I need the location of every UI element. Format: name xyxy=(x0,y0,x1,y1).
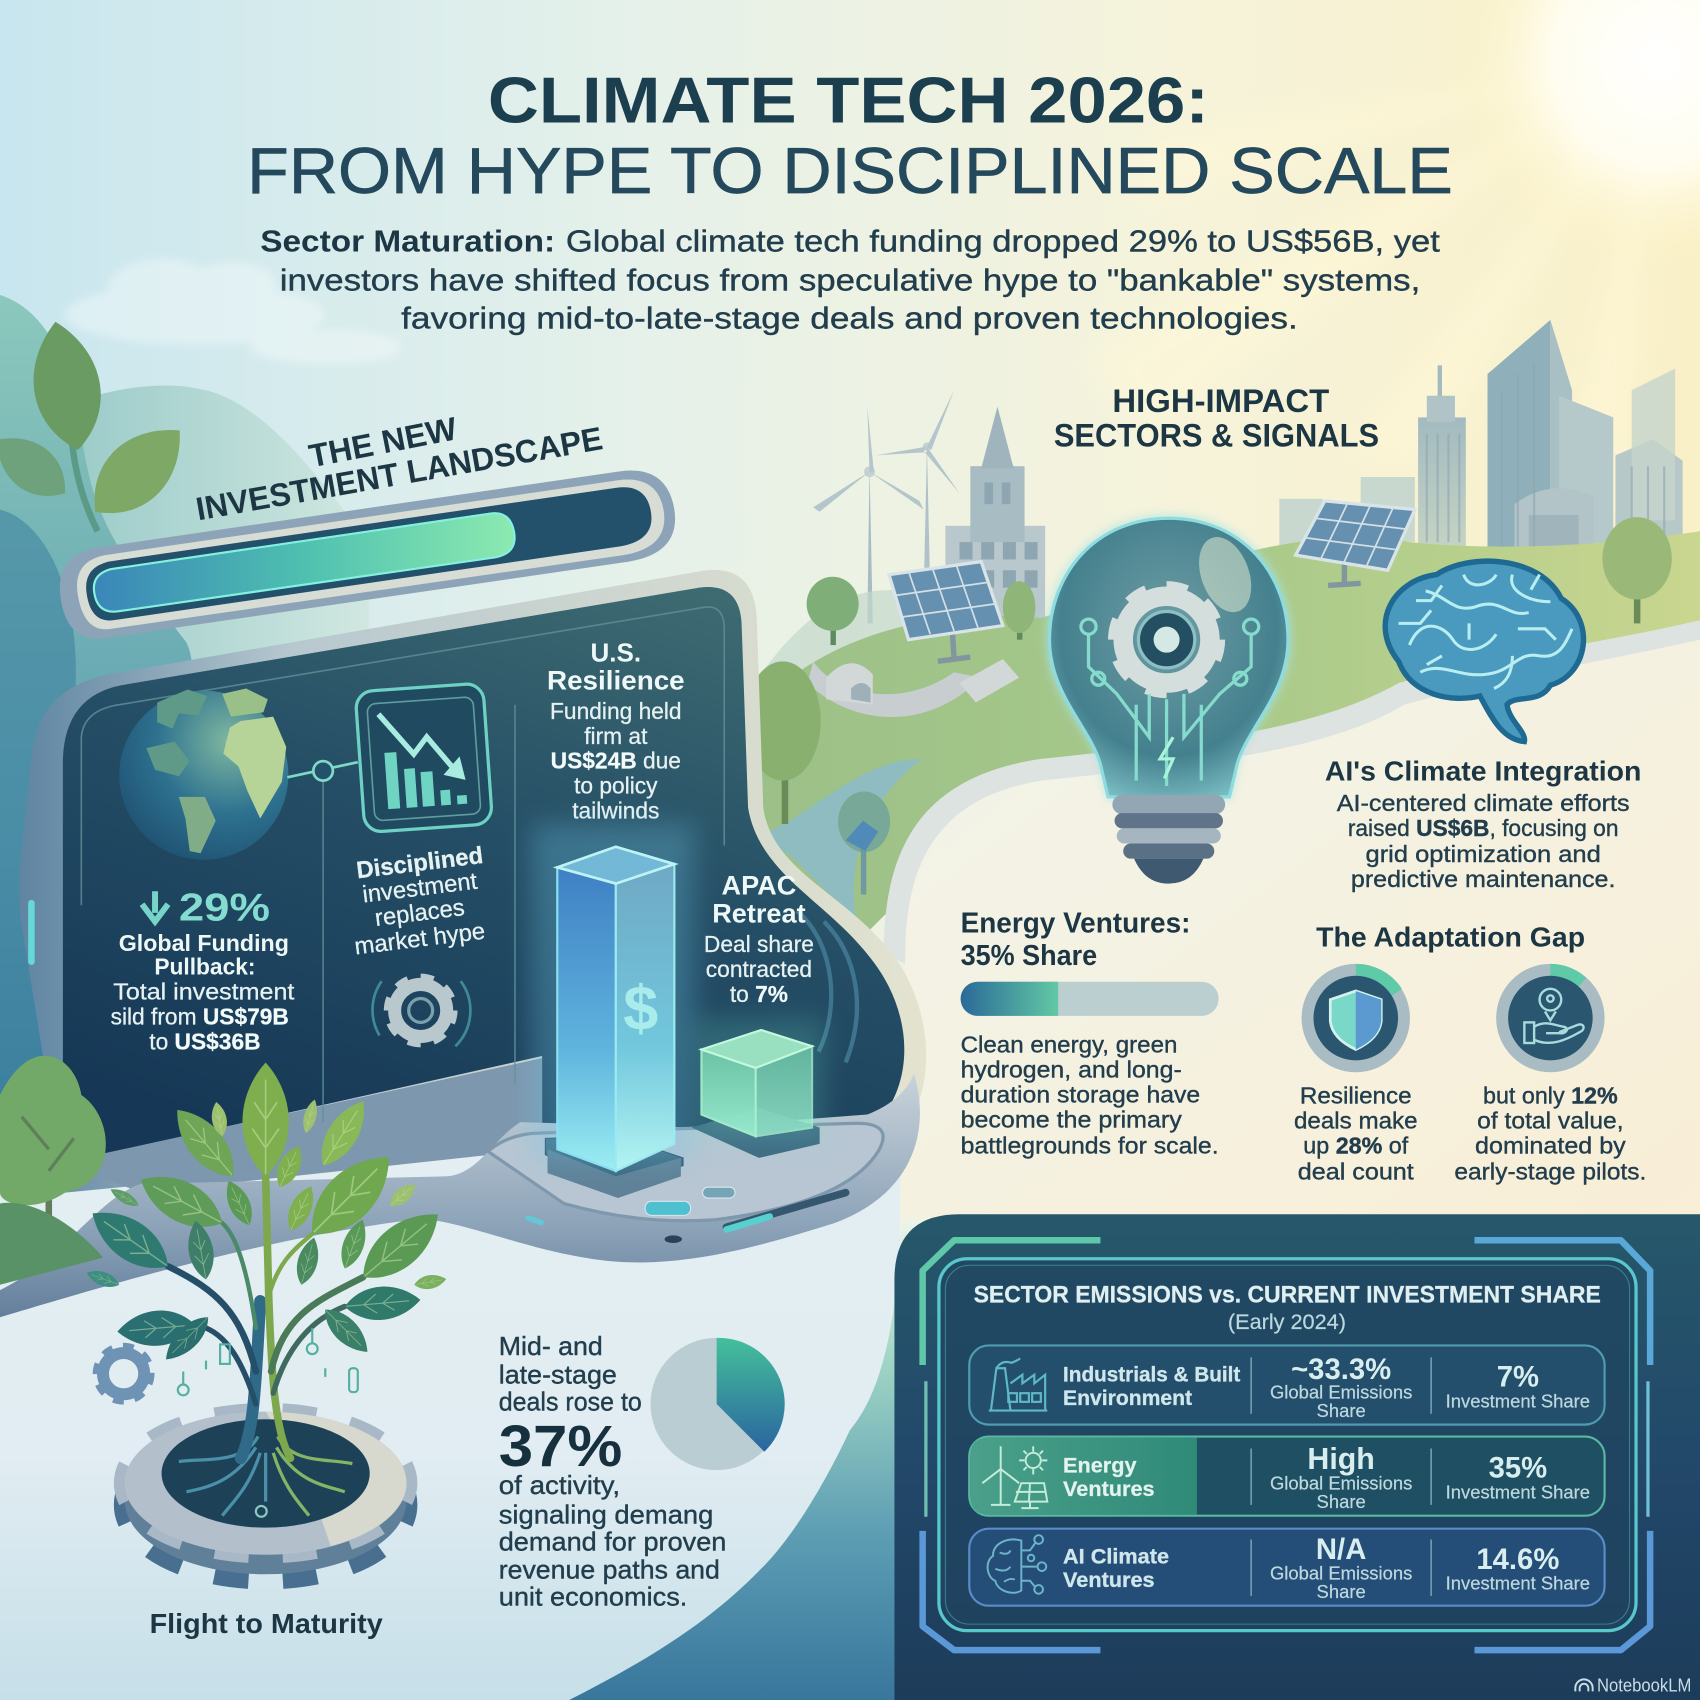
top progress bar xyxy=(60,471,675,639)
left hills xyxy=(0,295,369,1258)
bar: U.S. glass column xyxy=(531,824,694,1198)
text: resilience deals xyxy=(1294,1083,1418,1185)
gear base with roots xyxy=(125,1412,407,1576)
text: global funding pullback: Pullback: xyxy=(154,954,255,980)
wind turbines xyxy=(813,390,960,623)
text: AI climate integration: AI-centered climate efforts xyxy=(1337,790,1630,816)
text: U.S. resilience: to policy xyxy=(574,773,658,799)
text: AI climate integration: AI's Climate Integration xyxy=(1325,755,1641,787)
text: global funding pullback xyxy=(111,886,295,1054)
table heading: (Early 2024) xyxy=(1228,1309,1346,1334)
row: AI climate ventures: Ventures xyxy=(1063,1567,1155,1592)
text: AI climate integration: raised US$6B, focusing on xyxy=(1348,815,1618,841)
text: APAC retreat: APAC xyxy=(722,869,796,900)
text: global funding pullback: to US$36B xyxy=(149,1028,261,1054)
row: industrials: Investment Share xyxy=(1446,1390,1590,1411)
text: U.S. resilience xyxy=(547,637,685,824)
section heading: the new investment landscape: INVESTMENT LANDSCAPE xyxy=(193,420,605,527)
title: FROM HYPE TO DISCIPLINED SCALE xyxy=(247,134,1453,207)
text: mid and late stage deals: late-stage xyxy=(499,1359,617,1389)
text: resilience deals: Resilience xyxy=(1300,1083,1412,1109)
text: mid and late stage deals: of activity, xyxy=(499,1470,620,1500)
icon: lightbulb with gear xyxy=(1045,514,1292,884)
text: mid and late stage deals: revenue paths and xyxy=(499,1555,720,1585)
row: energy ventures xyxy=(969,1437,1605,1516)
text: U.S. resilience: US$24B due xyxy=(551,748,681,774)
text: APAC retreat: to 7% xyxy=(730,981,788,1007)
tablet left edge light xyxy=(28,900,35,965)
icon: circuit brain xyxy=(1385,561,1583,742)
row: energy ventures: Investment Share xyxy=(1446,1481,1590,1502)
text: U.S. resilience: Resilience xyxy=(547,665,685,696)
icon: small gear xyxy=(99,1349,149,1399)
table panel xyxy=(894,1214,1700,1700)
cream content area xyxy=(900,640,1700,1236)
row: industrials xyxy=(969,1345,1605,1425)
corner gradient xyxy=(569,1220,932,1700)
text: energy ventures: 35% Share xyxy=(961,940,1097,972)
progress bar 35 percent xyxy=(961,982,1219,1016)
row: industrials: ~33.3% xyxy=(1291,1354,1391,1386)
row: industrials: Environment xyxy=(1063,1385,1192,1410)
section heading: the new investment landscape: THE NEW xyxy=(306,410,460,474)
green plant top left xyxy=(0,316,201,534)
text: mid and late stage deals: demand for proven xyxy=(499,1526,726,1556)
row: industrials: 7% xyxy=(1497,1362,1539,1394)
intro paragraph: Sector Maturation: xyxy=(260,224,555,259)
row: industrials: Global Emissions xyxy=(1270,1382,1412,1403)
section heading: high-impact sectors: HIGH-IMPACT xyxy=(1112,383,1329,419)
row: industrials: Industrials & Built xyxy=(1063,1361,1240,1386)
watermark: NotebookLM xyxy=(1597,1674,1691,1695)
text: APAC retreat: Retreat xyxy=(712,898,806,929)
intro paragraph: favoring mid-to-late-stage deals and proven technologies. xyxy=(401,301,1298,336)
text: disciplined investment xyxy=(353,842,487,960)
text: only 12 percent xyxy=(1454,1083,1646,1185)
row: energy ventures: Global Emissions xyxy=(1270,1473,1412,1494)
text: mid and late stage deals: 37% xyxy=(499,1414,622,1479)
icon: turbine sun solar xyxy=(982,1446,1047,1508)
icon: globe xyxy=(119,688,288,860)
table heading xyxy=(974,1282,1601,1334)
cream swoosh xyxy=(884,620,1700,976)
icon: falling chart xyxy=(355,683,493,833)
text: U.S. resilience: firm at xyxy=(584,723,648,749)
row: energy ventures: Share xyxy=(1317,1491,1366,1512)
title: CLIMATE TECH 2026: xyxy=(488,64,1209,137)
section heading: high-impact sectors xyxy=(1054,383,1379,454)
row: AI climate ventures: Global Emissions xyxy=(1270,1563,1412,1584)
icon: resilience shield ring xyxy=(1302,964,1410,1072)
text: resilience deals: deals make xyxy=(1294,1108,1418,1134)
text: global funding pullback: sild from US$79B xyxy=(111,1004,289,1030)
text: disciplined investment: replaces xyxy=(373,894,466,932)
text: AI climate integration: grid optimization and xyxy=(1366,841,1601,867)
lower white area xyxy=(0,1084,900,1700)
intro paragraph: Global climate tech funding dropped 29% to US$56B, yet xyxy=(566,224,1440,259)
icon: factory xyxy=(989,1358,1047,1411)
title xyxy=(247,64,1453,207)
text: energy ventures: battlegrounds for scale. xyxy=(961,1133,1219,1159)
row: energy ventures: 35% xyxy=(1489,1453,1547,1485)
bar: U.S. glass column: $ xyxy=(623,974,658,1044)
text: only 12 percent: of total value, xyxy=(1477,1108,1624,1134)
row: AI climate ventures: AI Climate xyxy=(1063,1543,1169,1568)
heading: the adaptation gap: The Adaptation Gap xyxy=(1316,920,1585,952)
icon: gear xyxy=(372,980,470,1046)
text: global funding pullback: Global Funding xyxy=(119,930,289,956)
icon: hand with bulb ring xyxy=(1496,964,1605,1072)
text: resilience deals: up 28% of xyxy=(1303,1133,1409,1159)
row: AI climate ventures: N/A xyxy=(1316,1534,1366,1566)
sapling with leaves xyxy=(81,1062,451,1458)
text: mid and late stage deals: Mid- and xyxy=(499,1331,603,1361)
tree bottom left xyxy=(0,1056,106,1285)
text: AI climate integration xyxy=(1325,755,1641,892)
solar panel: hill xyxy=(1296,501,1415,585)
row: AI climate ventures: Share xyxy=(1317,1581,1366,1602)
tablet outer frame xyxy=(20,570,926,1193)
text: disciplined investment: market hype xyxy=(353,918,487,960)
row: AI climate ventures xyxy=(969,1529,1605,1606)
text: U.S. resilience: tailwinds xyxy=(572,798,659,824)
tablet screen xyxy=(63,587,904,1159)
text: APAC retreat: Deal share xyxy=(704,931,814,957)
device tray xyxy=(488,1123,883,1243)
landscape trees and small buildings xyxy=(745,517,1672,894)
intro paragraph xyxy=(260,224,1440,336)
icon: AI brain circuit xyxy=(988,1535,1046,1594)
green landscape xyxy=(748,531,1700,976)
text: APAC retreat xyxy=(704,869,814,1007)
device base xyxy=(0,1073,920,1317)
text: energy ventures: become the primary xyxy=(961,1107,1182,1133)
city skyline xyxy=(1279,320,1683,607)
text: AI climate integration: predictive maintenance. xyxy=(1351,866,1615,892)
row: energy ventures: Energy xyxy=(1063,1452,1137,1477)
text: resilience deals: deal count xyxy=(1298,1159,1414,1185)
row: AI climate ventures: 14.6% xyxy=(1476,1544,1559,1576)
connector line xyxy=(287,761,358,781)
text: U.S. resilience: Funding held xyxy=(550,698,682,724)
text: APAC retreat: contracted xyxy=(706,956,812,982)
label: flight to maturity: Flight to Maturity xyxy=(150,1607,383,1639)
text: mid and late stage deals: unit economics. xyxy=(499,1582,687,1612)
text: only 12 percent: early-stage pilots. xyxy=(1454,1159,1646,1185)
text: global funding pullback: Total investment xyxy=(113,979,295,1005)
text: energy ventures: Energy Ventures: xyxy=(961,907,1190,939)
text: energy ventures: Clean energy, green xyxy=(961,1032,1177,1058)
row: AI climate ventures: Investment Share xyxy=(1446,1572,1590,1593)
text: only 12 percent: dominated by xyxy=(1475,1133,1626,1159)
section heading: high-impact sectors: SECTORS & SIGNALS xyxy=(1054,418,1379,454)
swirl on tablet curve xyxy=(797,911,857,1062)
text: mid and late stage deals: deals rose to xyxy=(499,1387,642,1417)
text: global funding pullback: 29% xyxy=(179,886,270,929)
text: U.S. resilience: U.S. xyxy=(591,637,641,667)
solar panel: ground xyxy=(889,562,1003,661)
text: energy ventures xyxy=(961,907,1219,1159)
text: only 12 percent: but only 12% xyxy=(1483,1083,1618,1109)
row: energy ventures: Ventures xyxy=(1063,1476,1155,1501)
frame corners xyxy=(923,1240,1650,1650)
text: disciplined investment: Disciplined xyxy=(355,842,485,884)
screen inner lines xyxy=(81,607,724,1122)
text: energy ventures: hydrogen, and long- xyxy=(961,1057,1182,1083)
bar: APAC glass cube xyxy=(692,1019,824,1158)
text: energy ventures: duration storage have xyxy=(961,1082,1200,1108)
text: mid and late stage deals xyxy=(499,1331,726,1612)
row: energy ventures: High xyxy=(1307,1443,1375,1476)
text: mid and late stage deals: signaling demang xyxy=(499,1499,713,1529)
distant classical tower building xyxy=(945,407,1045,623)
text: disciplined investment: investment xyxy=(361,868,479,909)
pie chart 37 percent xyxy=(651,1338,785,1470)
row: industrials: Share xyxy=(1317,1400,1366,1421)
intro paragraph: investors have shifted focus from speculative hype to "bankable" systems, xyxy=(280,263,1420,298)
table heading: SECTOR EMISSIONS vs. CURRENT INVESTMENT SHARE xyxy=(974,1282,1601,1309)
